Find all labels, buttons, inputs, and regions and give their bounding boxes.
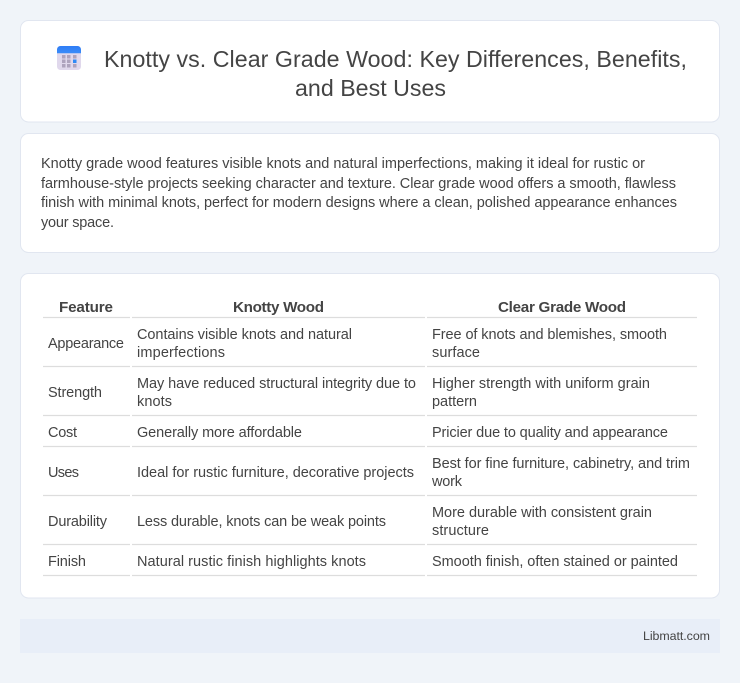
title: Knotty vs. Clear Grade Wood: Key Differences, Benefits, bbox=[104, 46, 687, 72]
row: uses bbox=[48, 456, 690, 490]
row: finish: Finish bbox=[48, 554, 86, 570]
footer text: Libmatt.com bbox=[643, 629, 710, 643]
row: durability: More durable with consistent grain bbox=[432, 505, 652, 521]
row: durability: Less durable, knots can be weak points bbox=[137, 514, 386, 530]
row: appearance: surface bbox=[432, 345, 480, 361]
row: strength bbox=[48, 376, 650, 410]
row: finish: Smooth finish, often stained or painted bbox=[432, 554, 678, 570]
panel: header bbox=[20, 20, 720, 122]
row: strength: Strength bbox=[48, 385, 102, 401]
row: appearance: Appearance bbox=[48, 336, 124, 352]
row: durability: structure bbox=[432, 523, 489, 539]
intro text: finish with minimal knots, perfect for modern designs where a clean, polished appearance enhances bbox=[41, 195, 677, 211]
row: durability bbox=[48, 505, 652, 539]
row: durability: Durability bbox=[48, 514, 108, 530]
table header row: Knotty Wood bbox=[233, 299, 324, 316]
row: strength: May have reduced structural integrity due to bbox=[137, 376, 416, 392]
row: finish bbox=[48, 554, 678, 570]
title: and Best Uses bbox=[295, 75, 446, 101]
row: appearance: Free of knots and blemishes, smooth bbox=[432, 327, 667, 343]
row: uses: work bbox=[431, 474, 463, 490]
icon: calendar bbox=[57, 46, 81, 70]
title bbox=[104, 46, 687, 101]
footer bar bbox=[20, 619, 720, 653]
row: strength: pattern bbox=[432, 394, 477, 410]
row: strength: knots bbox=[137, 394, 172, 410]
row: uses: Uses bbox=[48, 465, 79, 481]
row: uses: Ideal for rustic furniture, decorative projects bbox=[137, 465, 414, 481]
row: appearance: imperfections bbox=[137, 345, 225, 361]
panel: comparison table bbox=[20, 274, 720, 598]
intro text bbox=[41, 156, 677, 231]
row: cost: Pricier due to quality and appearance bbox=[432, 425, 668, 441]
row: appearance bbox=[48, 327, 667, 361]
table header row bbox=[59, 299, 626, 316]
row: cost bbox=[48, 425, 668, 441]
panel: introduction bbox=[20, 134, 720, 252]
intro text: Knotty grade wood features visible knots and natural imperfections, making it ideal for rustic or bbox=[41, 156, 645, 172]
row: cost: Generally more affordable bbox=[137, 425, 302, 441]
row: cost: Cost bbox=[48, 425, 77, 441]
intro text: your space. bbox=[41, 215, 114, 231]
intro text: farmhouse-style projects seeking character and texture. Clear grade wood offers a smooth, flawless bbox=[41, 176, 676, 192]
row: strength: Higher strength with uniform grain bbox=[432, 376, 650, 392]
table header row: Clear Grade Wood bbox=[498, 299, 626, 316]
row: finish: Natural rustic finish highlights knots bbox=[137, 554, 366, 570]
table header row: Feature bbox=[59, 299, 113, 316]
row: uses: Best for fine furniture, cabinetry, and trim bbox=[432, 456, 690, 472]
row: appearance: Contains visible knots and natural bbox=[137, 327, 352, 343]
